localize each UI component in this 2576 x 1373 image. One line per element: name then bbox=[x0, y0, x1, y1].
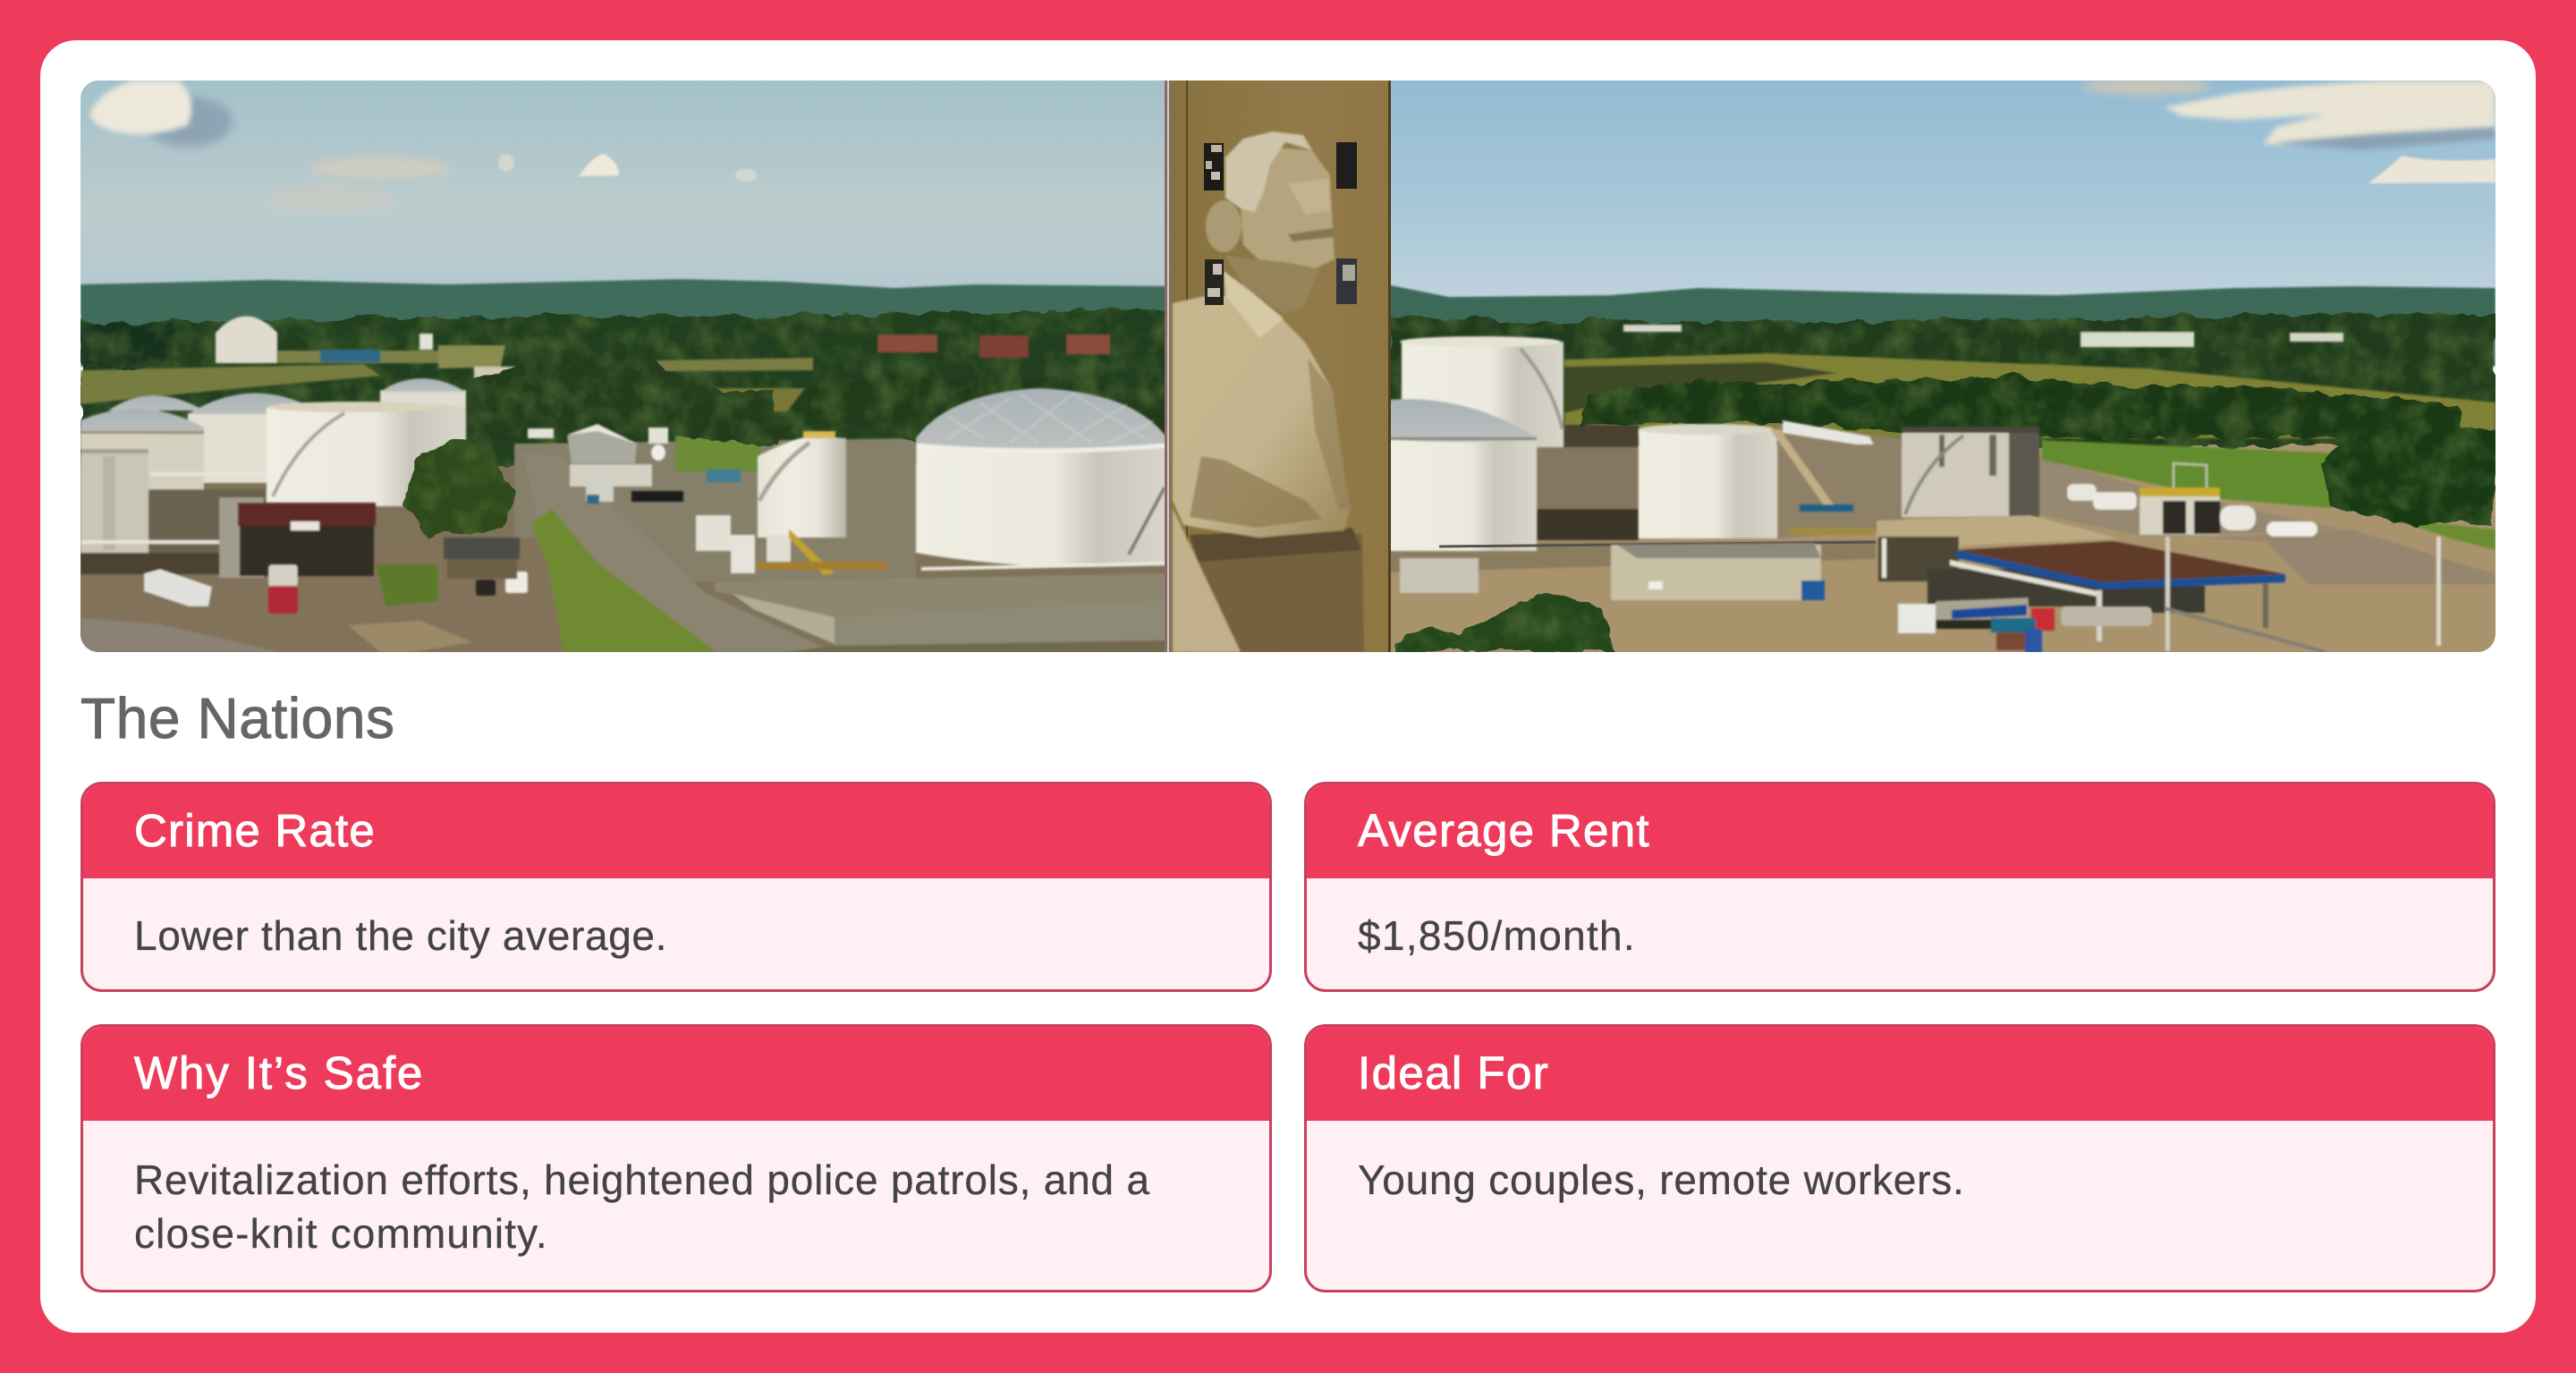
mural: shirt bbox=[1173, 296, 1351, 538]
right side tanks bbox=[1389, 336, 1875, 551]
left ground bbox=[80, 436, 1167, 652]
mural: ear bbox=[1206, 200, 1241, 252]
big dome tank bbox=[916, 388, 1170, 569]
tan roof bbox=[1877, 515, 2120, 554]
left tank cluster bbox=[80, 317, 466, 574]
tanker trucks bbox=[1898, 598, 2152, 653]
silo tower bbox=[1171, 81, 1391, 652]
big tree bbox=[404, 439, 516, 537]
distant hills bbox=[80, 279, 2496, 367]
fuel loading rack bbox=[219, 497, 376, 578]
small house bbox=[444, 538, 520, 579]
panel: ideal for bbox=[1304, 1024, 2496, 1292]
tower windows bbox=[1204, 142, 1357, 305]
fields and brick buildings, left bbox=[80, 334, 1110, 415]
average rent heading: Average Rent bbox=[1358, 805, 1650, 856]
right ground bbox=[1388, 425, 2496, 584]
far tree band bbox=[80, 309, 2496, 465]
why it's safe heading: Why It’s Safe bbox=[134, 1047, 424, 1098]
mural: man bbox=[1173, 131, 1364, 652]
bottom trees bbox=[1392, 595, 1614, 652]
sky bbox=[80, 81, 2496, 313]
fields, right bbox=[1564, 325, 2496, 438]
why it's safe heading bbox=[80, 1024, 1272, 1121]
base ground bbox=[80, 420, 2496, 652]
panel: crime rate bbox=[80, 782, 1272, 992]
panel: why it's safe bbox=[80, 1024, 1272, 1292]
mural: sleeve strip bbox=[1173, 508, 1241, 652]
hero photo: aerial view of tank farm with mural tower bbox=[80, 81, 2496, 652]
trucks and cars, left lot bbox=[144, 564, 528, 614]
stained tank bbox=[1902, 427, 2039, 517]
crime rate heading bbox=[80, 782, 1272, 878]
white buildings bbox=[528, 424, 741, 504]
mural: collar bbox=[1224, 271, 1284, 338]
mural: face bbox=[1241, 147, 1335, 268]
mural: trousers bbox=[1190, 534, 1364, 652]
fuel canopy bbox=[1877, 515, 2441, 652]
right tree rows bbox=[1579, 376, 2496, 526]
brown roof bbox=[1957, 541, 2285, 582]
why it's safe text bbox=[134, 1157, 1150, 1257]
ideal for heading: Ideal For bbox=[1358, 1047, 1549, 1098]
crime rate heading: Crime Rate bbox=[134, 805, 376, 856]
why it's safe text: Revitalization efforts, heightened police patrols, and a bbox=[134, 1157, 1150, 1203]
ideal for text: Young couples, remote workers. bbox=[1358, 1157, 1965, 1203]
title: The Nations bbox=[80, 686, 395, 750]
mural: hair bbox=[1225, 131, 1312, 212]
why it's safe text: close-knit community. bbox=[134, 1210, 548, 1257]
clouds bbox=[89, 79, 2496, 211]
average rent heading bbox=[1304, 782, 2496, 878]
right grass bbox=[2042, 440, 2343, 508]
far domed tank bbox=[216, 317, 277, 363]
crime rate text: Lower than the city average. bbox=[134, 912, 667, 959]
average rent text: $1,850/month. bbox=[1358, 912, 1636, 959]
lattice tower bbox=[1165, 81, 1171, 652]
blue fascia bbox=[1957, 550, 2285, 589]
white shed and office building bbox=[1400, 543, 1825, 600]
mid tank with stair bbox=[696, 431, 887, 575]
storage cylinders bbox=[2067, 463, 2318, 537]
mid trees bbox=[80, 325, 1166, 447]
panel: average rent bbox=[1304, 782, 2496, 992]
pipe line bbox=[1439, 542, 1876, 547]
ideal for heading bbox=[1304, 1024, 2496, 1121]
mural: neck bbox=[1225, 256, 1321, 315]
